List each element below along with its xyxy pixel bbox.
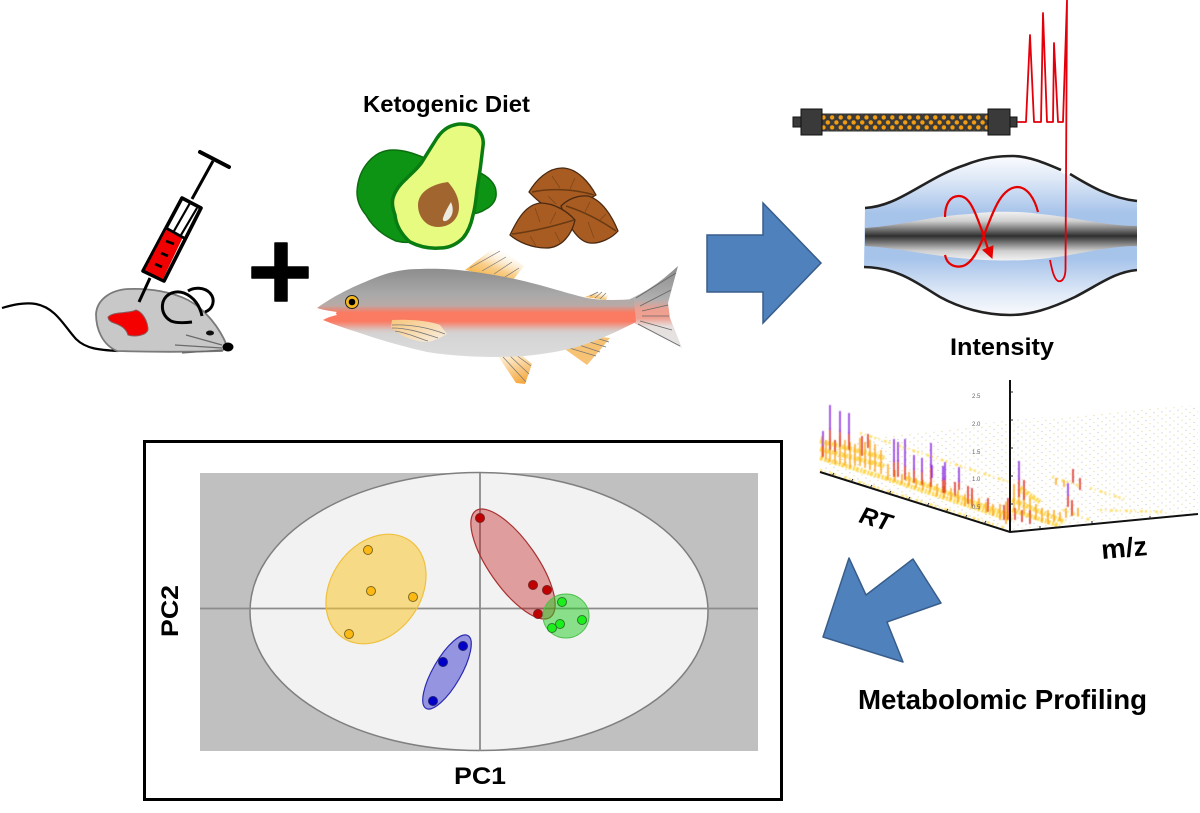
confidence ellipse (250, 472, 708, 750)
mouse tail (2, 303, 118, 351)
arrow: to PCA plot (823, 558, 941, 662)
ventral fin (498, 354, 532, 384)
plot background (200, 473, 758, 751)
axis label: RT: RT (856, 502, 897, 538)
plot frame (144, 442, 782, 800)
fish body (317, 269, 636, 357)
icon: nuts (510, 168, 618, 248)
avocado half (392, 124, 483, 248)
axis label: PC2: PC2 (157, 585, 184, 637)
axis label: PC1: PC1 (454, 763, 506, 790)
spectrum tick labels (972, 394, 981, 511)
spectrum yellow bands (820, 433, 1163, 528)
mouse ears (162, 288, 213, 323)
cluster: green (543, 594, 589, 638)
spectrum tick labels: 2.5 (972, 394, 981, 400)
nut: right (561, 196, 618, 243)
ion trajectory (945, 187, 1038, 267)
dorsal fin (465, 249, 524, 280)
plot axes (200, 473, 758, 751)
spectrum tick labels: 2.0 (972, 422, 981, 428)
spectrum axes (820, 380, 1198, 532)
nut: left (510, 203, 575, 248)
avocado back (357, 150, 496, 242)
mouse eye (206, 330, 214, 336)
spectrum data layers (820, 405, 1163, 528)
rear dorsal fin (585, 291, 609, 300)
spectrum tick labels: 0.5 (972, 505, 981, 511)
heading: Ketogenic Diet: Ketogenic Diet (363, 91, 530, 117)
mouse whiskers (175, 335, 222, 353)
spectrum tick labels: 1.0 (972, 477, 981, 483)
cluster: yellow (305, 515, 447, 663)
icon: LC column (793, 109, 1017, 135)
spectrum dense yellow mass (820, 441, 1065, 526)
label: Intensity: Intensity (950, 334, 1054, 361)
spectrum orange stubs (822, 436, 1078, 524)
cluster: blue (414, 629, 480, 715)
spectrum tick labels: 1.5 (972, 450, 981, 456)
tumour (108, 310, 148, 336)
avocado seed (418, 182, 459, 227)
icon: orbitrap mass analyzer (864, 156, 1137, 315)
mouse body (96, 289, 227, 352)
tail fin (630, 266, 682, 348)
spectrum red spikes (823, 428, 1080, 524)
syringe (139, 152, 229, 302)
cluster: red (456, 497, 570, 631)
axis label: m/z: m/z (1100, 531, 1148, 565)
panel: PCA score plot (144, 442, 782, 800)
spectrum purple spikes (823, 405, 1068, 496)
nut: top (529, 168, 596, 210)
anal fin (562, 336, 610, 365)
icon: fish (317, 249, 682, 384)
chart: chromatogram trace (1017, 0, 1067, 281)
pectoral fin (391, 320, 447, 342)
label: Metabolomic Profiling: Metabolomic Profiling (858, 684, 1147, 715)
spectrum axis ticks (832, 392, 1150, 529)
seed highlight (443, 202, 453, 221)
spectrum floor dots (820, 405, 1198, 532)
fish eye (346, 296, 358, 308)
mouse nose (222, 342, 234, 352)
arrow: to mass spectrometry (707, 203, 821, 323)
icon: mouse with tumour and syringe (2, 152, 234, 353)
icon: avocado (357, 124, 496, 248)
icon: plus sign (252, 243, 308, 301)
chart: 3D LC-MS spectrum (820, 380, 1198, 532)
